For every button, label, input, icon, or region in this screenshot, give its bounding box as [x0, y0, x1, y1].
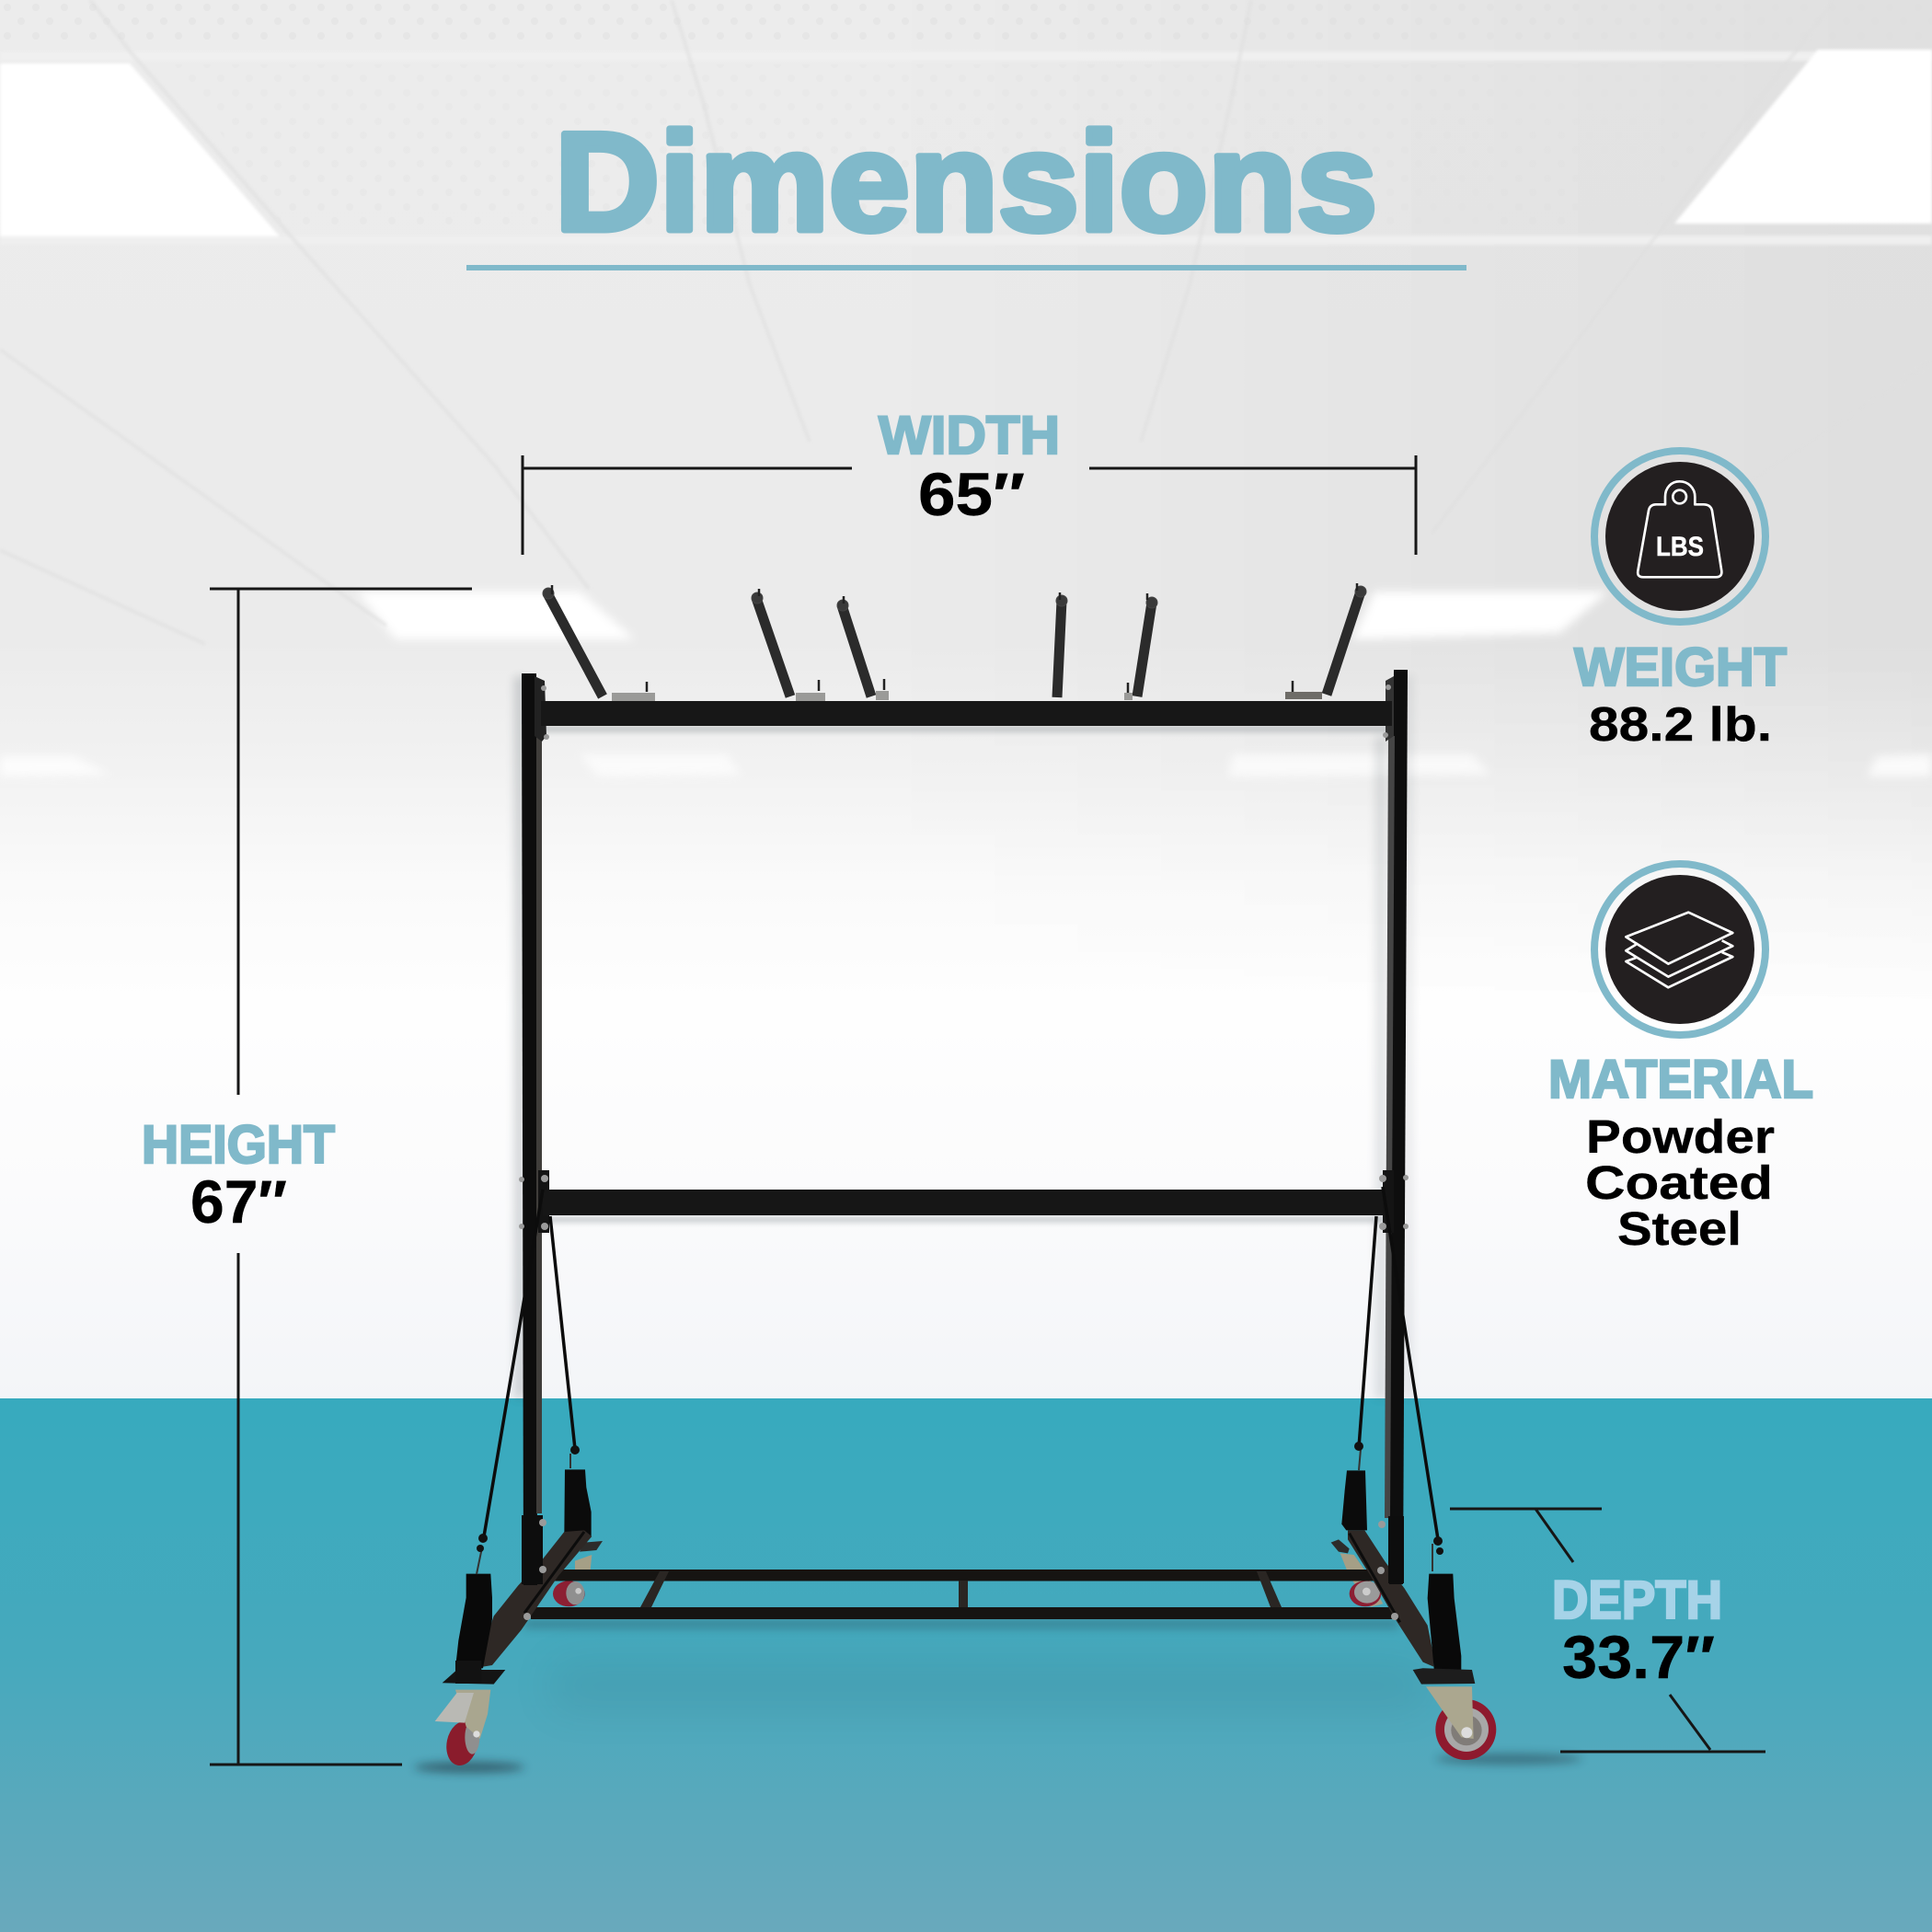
right base and casters [1331, 1470, 1496, 1760]
background: teal floor [0, 1398, 1932, 1932]
material block [1548, 864, 1813, 1255]
material value [1585, 1110, 1775, 1255]
width label: WIDTH [879, 406, 1060, 466]
height label: HEIGHT [142, 1115, 335, 1175]
floor rails [531, 1570, 1394, 1619]
rack shadows on wall and floor [414, 676, 1582, 1773]
icon: weight: LBS [1656, 532, 1704, 562]
material value: Coated [1585, 1156, 1773, 1209]
height dimension [142, 589, 472, 1765]
depth dimension [1450, 1509, 1765, 1752]
depth label: DEPTH [1552, 1570, 1722, 1630]
right base beam [1348, 1530, 1433, 1667]
rack top crossbar [541, 701, 1392, 726]
right rear bracket [1341, 1470, 1367, 1530]
rack middle crossbar [543, 1190, 1383, 1215]
depth measure lines [1450, 1509, 1765, 1752]
rack top prongs [543, 583, 1366, 701]
right front bracket [1428, 1574, 1461, 1682]
material value: Powder [1586, 1110, 1775, 1163]
width value: 65″ [918, 460, 1025, 528]
weight block [1574, 451, 1787, 752]
background: ceiling and wall [0, 0, 1932, 1398]
right front caster [1426, 1686, 1496, 1760]
material label: MATERIAL [1548, 1050, 1813, 1110]
rack posts [522, 670, 1408, 1585]
rack bolts [519, 684, 1409, 1620]
left front bracket [455, 1574, 492, 1668]
bungee cords [477, 1187, 1443, 1574]
title underline [466, 265, 1466, 270]
weight value: 88.2 lb. [1589, 698, 1772, 752]
icon: weight [1594, 451, 1765, 622]
width dimension [523, 406, 1416, 555]
left front caster [435, 1690, 490, 1768]
title: Dimensions [555, 104, 1377, 260]
icon: stacked sheets [1594, 864, 1765, 1035]
left base beam [483, 1530, 592, 1667]
height value: 67″ [190, 1167, 287, 1236]
depth value: 33.7″ [1562, 1623, 1715, 1691]
left caster plate [443, 1670, 505, 1685]
material value: Steel [1617, 1202, 1742, 1255]
weight label: WEIGHT [1574, 638, 1787, 697]
rack: product photo illustration [435, 583, 1496, 1768]
left base and casters [435, 1469, 603, 1768]
rear casters [553, 1553, 1383, 1607]
width measure lines [523, 455, 1416, 555]
height measure lines [210, 589, 472, 1765]
left rear bracket [564, 1469, 592, 1536]
